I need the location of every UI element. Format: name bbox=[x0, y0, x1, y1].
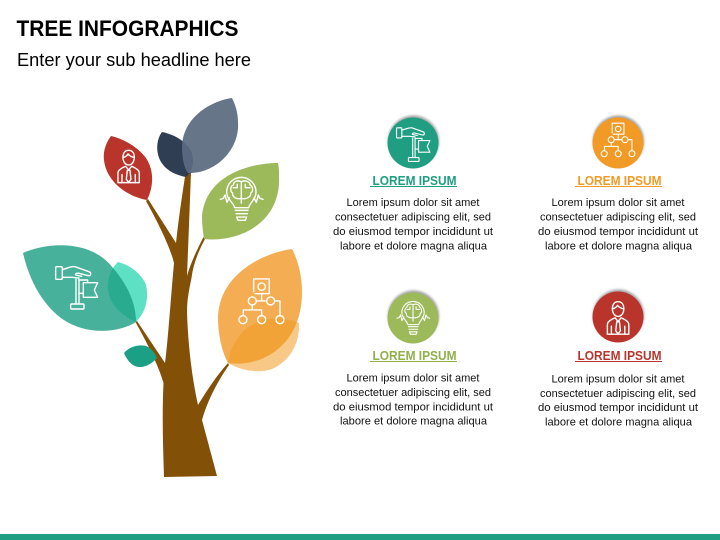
body text: orange: labore et dolore magna aliqua bbox=[545, 240, 693, 252]
title: TREE INFOGRAPHICS bbox=[16, 16, 238, 41]
icon badge: teal bbox=[388, 116, 439, 168]
body text: orange: consectetuer adipiscing elit, sed bbox=[540, 212, 696, 224]
body text: red: labore et dolore magna aliqua bbox=[545, 417, 693, 429]
underline: orange bbox=[575, 186, 662, 187]
panel: red item bbox=[538, 290, 701, 429]
icon: org chart on orange leaf bbox=[239, 279, 284, 324]
slate leaf bbox=[182, 98, 238, 173]
body text: red: do eiusmod tempor incididunt ut bbox=[538, 402, 698, 414]
icon badge: orange bbox=[592, 116, 644, 168]
body text: green: consectetuer adipiscing elit, sed bbox=[335, 387, 491, 399]
large orange leaf bbox=[218, 249, 302, 364]
green leaf bbox=[202, 163, 279, 239]
heading: teal: LOREM IPSUM bbox=[372, 173, 456, 188]
underline: green bbox=[370, 361, 457, 362]
heading: red: LOREM IPSUM bbox=[578, 348, 662, 363]
light teal leaf bbox=[108, 262, 147, 322]
dark navy leaf bbox=[157, 132, 193, 177]
tree trunk bbox=[136, 170, 229, 477]
body text: teal: Lorem ipsum dolor sit amet bbox=[346, 197, 480, 209]
body text: teal: consectetuer adipiscing elit, sed bbox=[335, 212, 491, 224]
subtitle: Enter your sub headline here bbox=[17, 50, 251, 70]
red leaf bbox=[104, 136, 152, 200]
body text: red: consectetuer adipiscing elit, sed bbox=[540, 388, 696, 400]
body text: green: do eiusmod tempor incididunt ut bbox=[333, 401, 493, 413]
large teal leaf bbox=[23, 245, 136, 331]
icon: person on red leaf bbox=[118, 150, 139, 183]
body text: green: labore et dolore magna aliqua bbox=[340, 416, 488, 428]
body text: orange: do eiusmod tempor incididunt ut bbox=[538, 226, 698, 238]
light orange leaf bbox=[228, 319, 299, 371]
panel: green item bbox=[333, 290, 496, 428]
icon: brain bulb on green leaf bbox=[220, 177, 263, 220]
icon: hand and flag on teal leaf bbox=[56, 267, 98, 309]
body text: orange: Lorem ipsum dolor sit amet bbox=[552, 197, 684, 209]
icon badge: green bbox=[388, 290, 439, 344]
body text: green: Lorem ipsum dolor sit amet bbox=[346, 372, 480, 384]
tree illustration bbox=[23, 98, 302, 477]
heading: green: LOREM IPSUM bbox=[372, 348, 456, 363]
small teal leaf bbox=[124, 345, 157, 367]
underline: red bbox=[575, 361, 662, 362]
icon badge: red bbox=[592, 290, 644, 342]
panel: orange item bbox=[538, 116, 701, 252]
footer bar bbox=[0, 534, 720, 540]
body text: teal: labore et dolore magna aliqua bbox=[340, 240, 488, 252]
panel: teal item bbox=[333, 116, 496, 252]
body text: teal: do eiusmod tempor incididunt ut bbox=[333, 226, 493, 238]
heading: orange: LOREM IPSUM bbox=[578, 173, 662, 188]
body text: red: Lorem ipsum dolor sit amet bbox=[552, 373, 684, 385]
underline: teal bbox=[370, 186, 457, 187]
